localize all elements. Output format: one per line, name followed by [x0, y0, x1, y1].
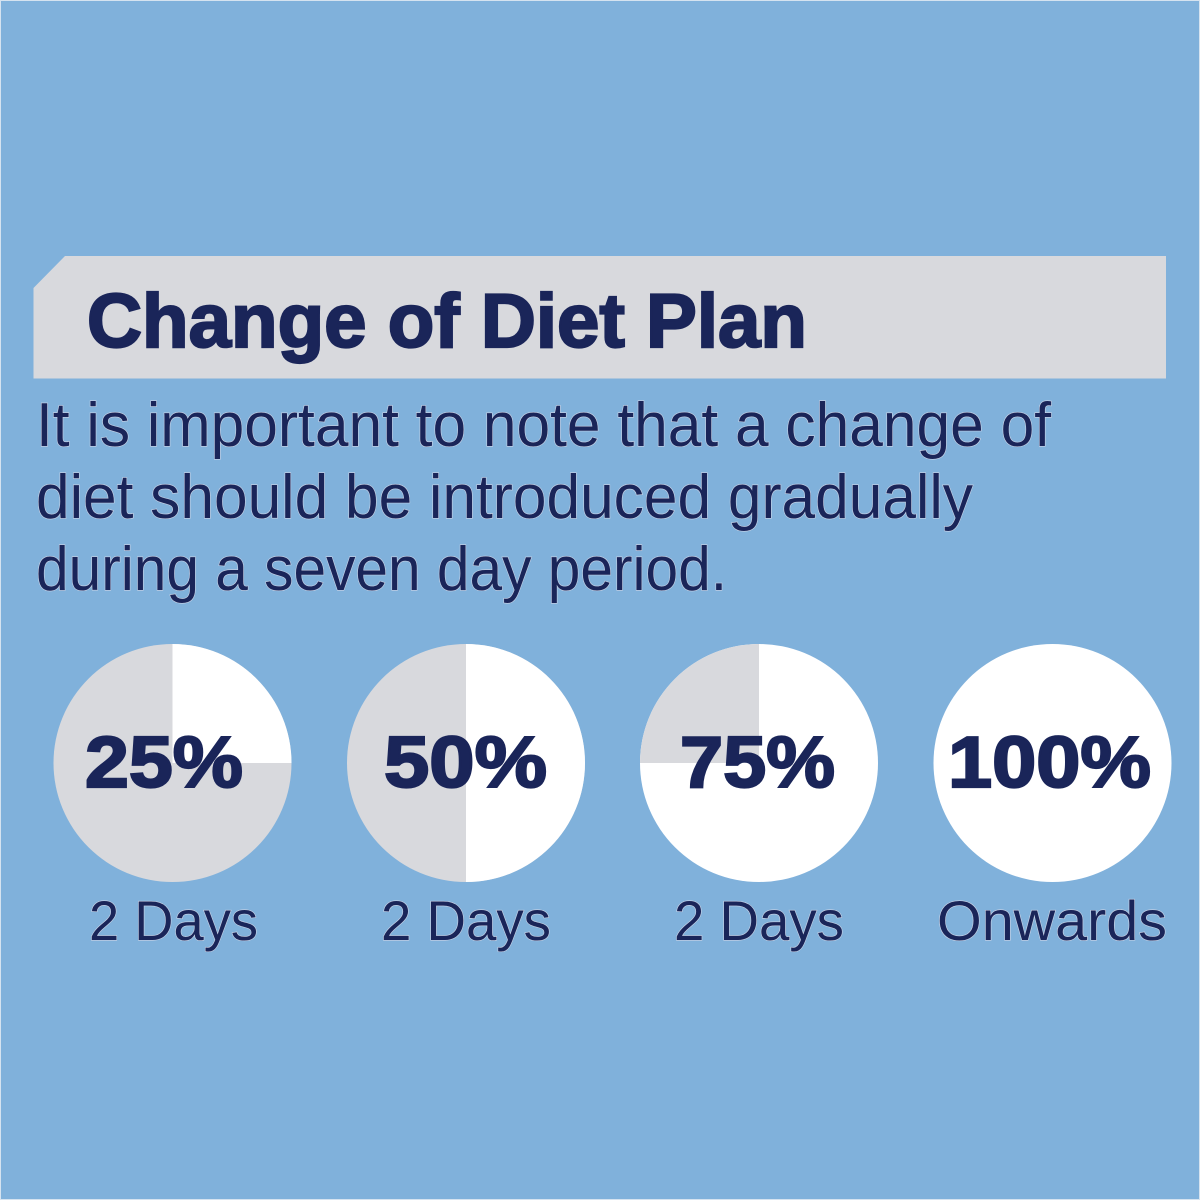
- heading banner: [34, 256, 1166, 378]
- intro paragraph: It is important to note that a change of: [36, 391, 1052, 460]
- pie: 75% for 2 days: 75%: [680, 723, 835, 803]
- label: 2 Days: 2 Days: [381, 889, 551, 952]
- pie: 100% onwards: 100%: [948, 723, 1151, 803]
- label: 2 Days: 2 Days: [89, 889, 258, 952]
- pie: 50% for 2 days: 50%: [384, 723, 547, 803]
- pie: 25% for 2 days: 25%: [85, 723, 243, 803]
- intro paragraph: [36, 391, 1052, 604]
- pie: 50% for 2 days: [347, 644, 585, 882]
- intro paragraph: during a seven day period.: [36, 535, 727, 604]
- title: Change of Diet Plan: [87, 279, 807, 364]
- pie: 75% for 2 days: [640, 644, 878, 882]
- pie: 25% for 2 days: [54, 644, 292, 882]
- intro paragraph: diet should be introduced gradually: [36, 463, 973, 532]
- pie: 100% onwards: [934, 644, 1172, 882]
- label: 2 Days: 2 Days: [674, 889, 844, 952]
- label: Onwards: Onwards: [937, 889, 1167, 952]
